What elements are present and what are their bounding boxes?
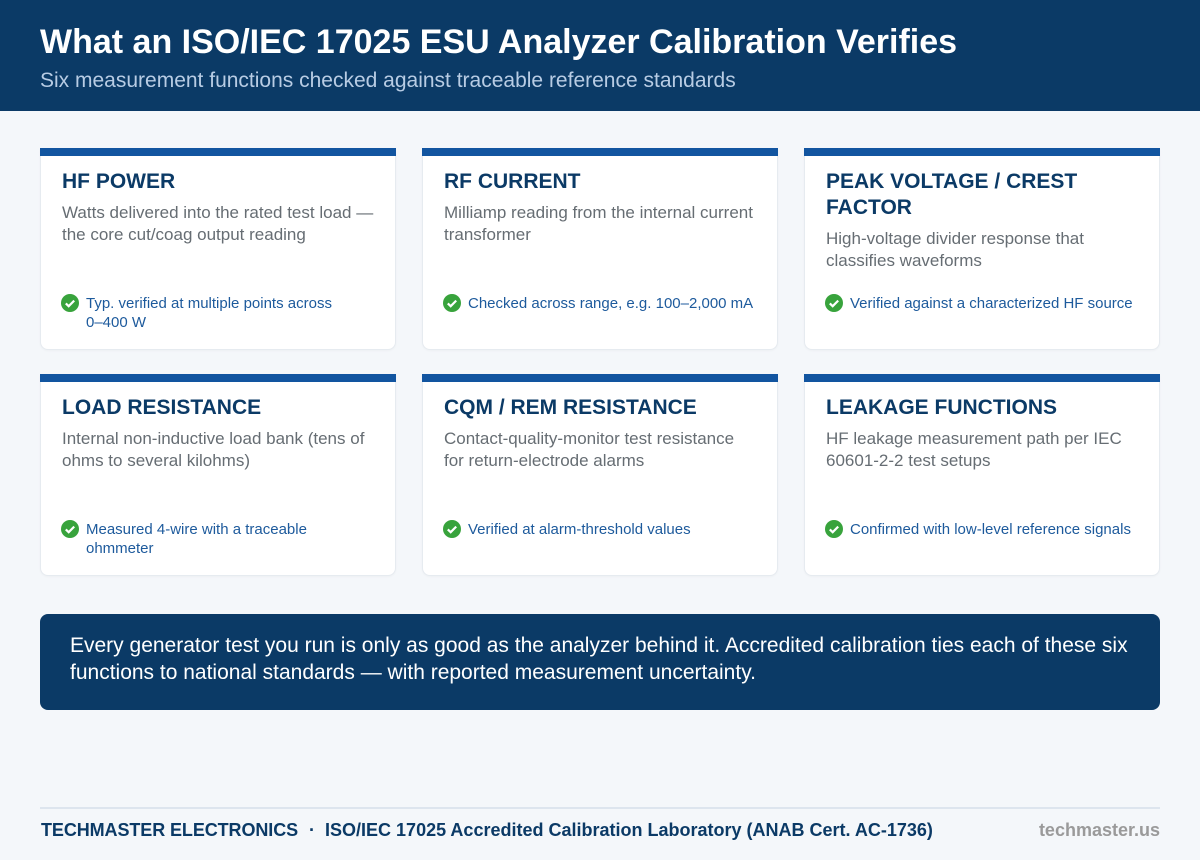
subtitle: Six measurement functions checked against traceable reference standards	[40, 69, 736, 92]
verification note: Confirmed with low-level reference signals	[850, 521, 1131, 538]
icon: check	[825, 294, 843, 312]
callout banner	[40, 614, 1160, 710]
icon: check	[443, 294, 461, 312]
panel: HF power	[40, 148, 396, 350]
verification note: Typ. verified at multiple points across 0–400 W	[86, 295, 332, 331]
heading: PEAK VOLTAGE / CREST FACTOR	[826, 170, 1077, 219]
callout banner: Every generator test you run is only as good as the analyzer behind it. Accredited calibration ties each of these six functions to national standards — with reported measurement uncertainty.	[70, 634, 1128, 684]
footer: laboratory credit: TECHMASTER ELECTRONICS · ISO/IEC 17025 Accredited Calibration Laboratory (ANAB Cert. AC-1736)	[41, 820, 933, 840]
verification note: Verified at alarm-threshold values	[468, 521, 691, 538]
description: HF leakage measurement path per IEC 60601-2-2 test setups	[826, 429, 1122, 470]
icon: check	[61, 520, 79, 538]
description: Watts delivered into the rated test load — the core cut/coag output reading	[62, 203, 373, 244]
heading: CQM / REM RESISTANCE	[444, 396, 697, 419]
description: Contact-quality-monitor test resistance for return-electrode alarms	[444, 429, 734, 470]
panel: RF current	[422, 148, 778, 350]
footer: website: techmaster.us	[1039, 820, 1160, 840]
description: Internal non-inductive load bank (tens of ohms to several kilohms)	[62, 429, 364, 470]
description: High-voltage divider response that classifies waveforms	[826, 229, 1084, 270]
verification note: Checked across range, e.g. 100–2,000 mA	[468, 295, 753, 312]
description: Milliamp reading from the internal current transformer	[444, 203, 753, 244]
panel: peak voltage	[804, 148, 1160, 350]
icon: check	[61, 294, 79, 312]
icon: check	[825, 520, 843, 538]
heading: LEAKAGE FUNCTIONS	[826, 396, 1057, 419]
panel: leakage functions	[804, 374, 1160, 576]
icon: check	[443, 520, 461, 538]
heading: LOAD RESISTANCE	[62, 396, 261, 419]
panel: CQM / REM resistance	[422, 374, 778, 576]
panel: load resistance	[40, 374, 396, 576]
title: What an ISO/IEC 17025 ESU Analyzer Calibration Verifies	[40, 23, 957, 61]
verification note: Verified against a characterized HF source	[850, 295, 1133, 312]
heading: RF CURRENT	[444, 170, 580, 193]
header band	[0, 0, 1200, 111]
verification note: Measured 4-wire with a traceable ohmmeter	[86, 521, 307, 557]
heading: HF POWER	[62, 170, 175, 193]
